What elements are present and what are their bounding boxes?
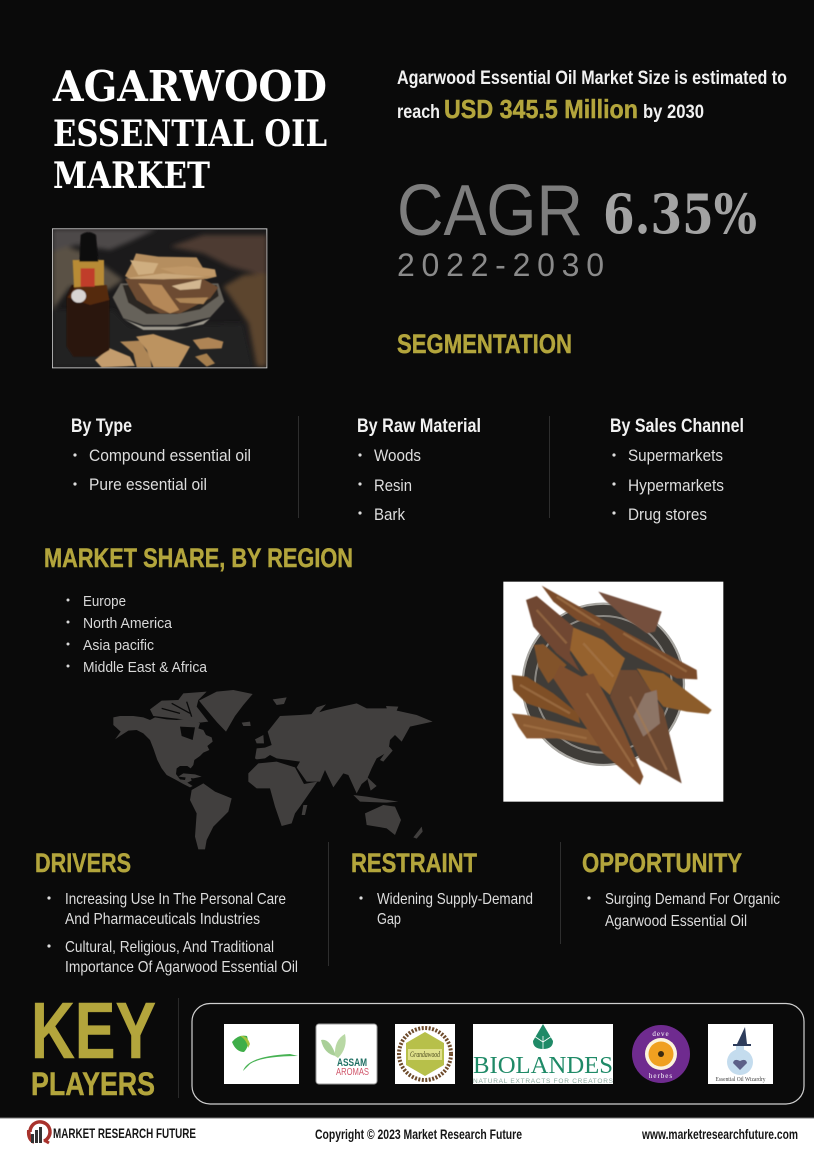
region list: Middle East & Africa [83, 659, 208, 676]
logo: Biolandes: BIOLANDES [473, 1053, 613, 1079]
copyright: Copyright © 2023 Market Research Future [315, 1126, 522, 1142]
drivers panel: Increasing Use In The Personal Care [65, 891, 286, 908]
photo: essential oil bottle and agarwood chips [52, 228, 267, 368]
logo: leaf mark [224, 1024, 299, 1084]
segmentation heading: SEGMENTATION [397, 329, 572, 359]
drivers panel: DRIVERS [35, 848, 131, 878]
logo: Deve Herbes: herbes [649, 1072, 673, 1080]
segment: by sales channel: Hypermarkets [628, 476, 724, 495]
segment: by sales channel: Drug stores [628, 505, 707, 524]
logo: Assam Aromas [316, 1024, 377, 1084]
segment: by raw material [357, 416, 481, 524]
opportunity panel: OPPORTUNITY [582, 848, 742, 878]
region list: North America [83, 615, 173, 632]
logo: Deve Herbes [632, 1025, 690, 1083]
logo: Deve Herbes: deve [652, 1030, 670, 1038]
bottle [67, 285, 109, 357]
region list: Asia pacific [83, 637, 154, 654]
segment: by raw material: Bark [374, 505, 405, 524]
restraint panel [351, 848, 533, 928]
restraint panel: Gap [377, 911, 401, 928]
opportunity panel [582, 848, 780, 930]
logo: Biolandes [473, 1024, 614, 1085]
photo: agarwood pieces on white [503, 582, 723, 802]
drivers panel: Cultural, Religious, And Traditional [65, 939, 274, 956]
market size statement: USD 345.5 Million [444, 94, 638, 124]
footer brand name: MARKET RESEARCH FUTURE [53, 1125, 196, 1141]
segment: by type [71, 416, 251, 494]
title [52, 62, 327, 197]
market size statement: by 2030 [643, 102, 704, 123]
segment: by type: Compound essential oil [89, 446, 251, 465]
restraint panel: RESTRAINT [351, 848, 477, 878]
CAGR figure [397, 171, 757, 283]
title: MARKET [53, 155, 210, 197]
logo: Assam Aromas: AROMAS [336, 1067, 369, 1078]
CAGR figure: CAGR [397, 171, 583, 251]
chips in front [95, 348, 135, 367]
logo: Assam Aromas: ASSAM [337, 1057, 367, 1069]
opportunity panel: Agarwood Essential Oil [605, 913, 747, 930]
footer [0, 1118, 814, 1150]
CAGR figure: 6.35% [603, 182, 757, 246]
opportunity panel: Surging Demand For Organic [605, 891, 780, 908]
drivers panel: Importance Of Agarwood Essential Oil [65, 959, 298, 976]
logo: Biolandes: NATURAL EXTRACTS FOR CREATORS [473, 1078, 614, 1085]
title: ESSENTIAL OIL [53, 113, 327, 155]
segment: by raw material: By Raw Material [357, 416, 481, 437]
drivers panel: And Pharmaceuticals Industries [65, 911, 260, 928]
title: AGARWOOD [52, 62, 327, 111]
market size statement: reach [397, 102, 440, 123]
key players panel [192, 1004, 804, 1104]
drivers panel [35, 848, 298, 976]
segment: by raw material: Woods [374, 446, 421, 465]
chips in bowl [125, 253, 217, 279]
world map [113, 690, 433, 849]
logo: Essential Oil Wizardry [708, 1024, 773, 1084]
logo: Grandawood: Grandawood [410, 1050, 441, 1059]
market share heading: MARKET SHARE, BY REGION [44, 543, 353, 573]
logo: Essential Oil Wizardry: Essential Oil Wizardry [716, 1077, 766, 1083]
segment: by raw material: Resin [374, 476, 412, 495]
segment: by sales channel: Supermarkets [628, 446, 723, 465]
key players heading: KEY [31, 986, 156, 1075]
icon: market research future logo [27, 1122, 50, 1144]
segment: by sales channel: By Sales Channel [610, 416, 744, 437]
restraint panel: Widening Supply-Demand [377, 891, 533, 908]
logo: Grandawood [395, 1024, 455, 1084]
region list: Europe [83, 593, 126, 610]
key players heading: PLAYERS [31, 1066, 155, 1102]
market size statement [397, 68, 787, 124]
segment: by sales channel [610, 416, 744, 524]
key players heading [31, 986, 156, 1102]
CAGR figure: 2022-2030 [397, 247, 604, 283]
segment: by type: Pure essential oil [89, 475, 207, 494]
segment: by type: By Type [71, 416, 132, 437]
bowl [113, 283, 224, 325]
region list [66, 593, 208, 676]
